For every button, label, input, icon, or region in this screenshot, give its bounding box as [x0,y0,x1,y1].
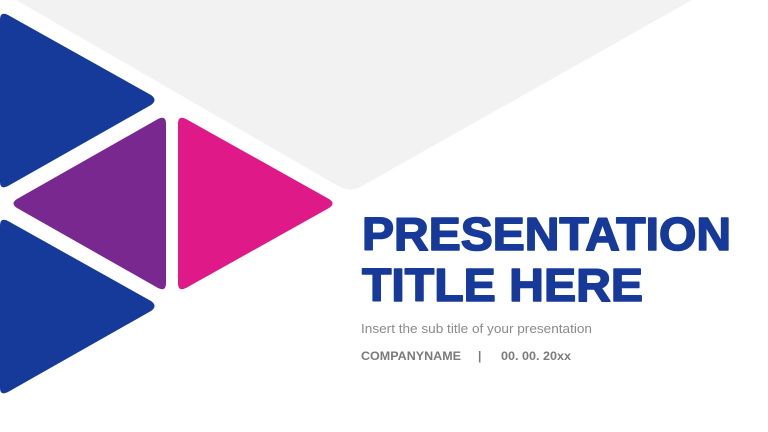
company and date line [361,349,571,363]
icon: bottom blue triangle [0,220,154,393]
company and date line: | [478,349,481,363]
title [362,208,731,311]
company and date line: 00. 00. 20xx [501,349,571,363]
company and date line: COMPANYNAME [361,349,461,363]
background gray chevron [16,0,692,190]
icon: purple triangle [14,118,166,289]
title: TITLE HERE [362,259,643,311]
title: PRESENTATION [362,208,731,260]
icon: top blue triangle [0,14,154,187]
icon: pink triangle [178,118,332,289]
subtitle: Insert the sub title of your presentation [361,321,592,336]
